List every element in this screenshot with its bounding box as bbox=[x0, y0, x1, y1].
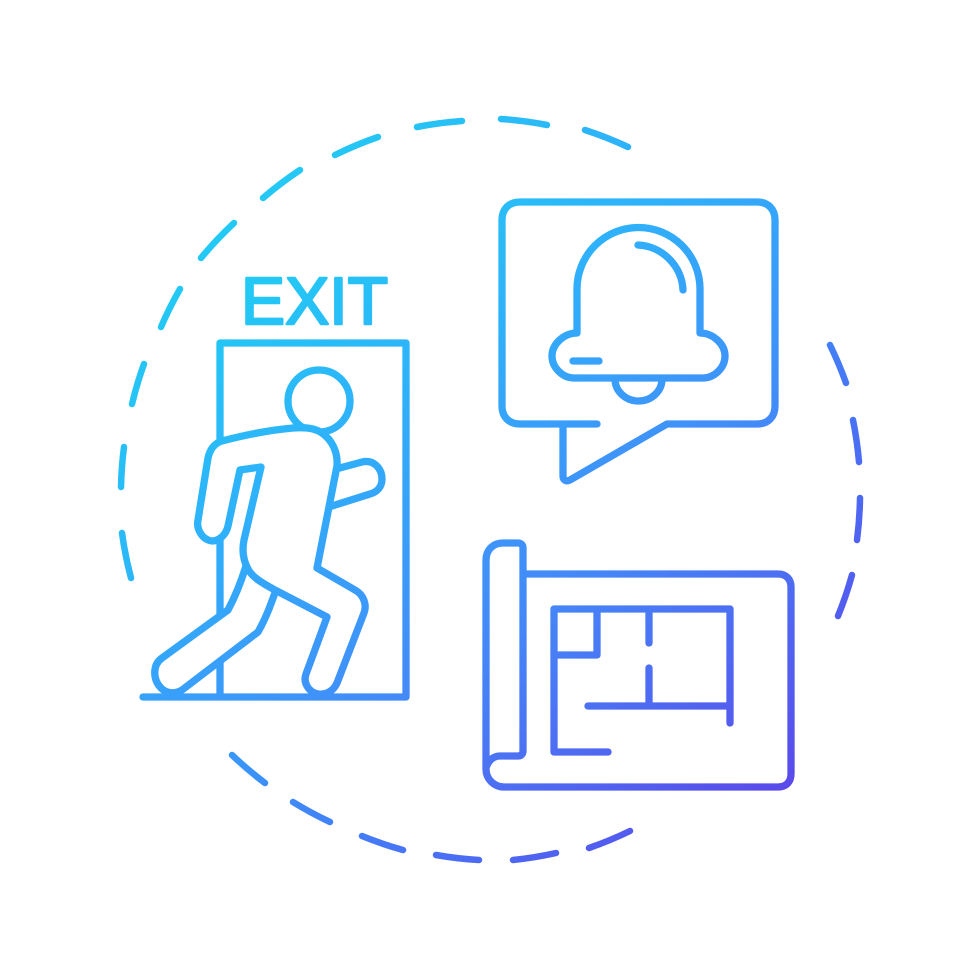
speech bubble bbox=[502, 202, 775, 481]
panel: blueprint floor plan bbox=[486, 543, 791, 787]
panel: speech bubble with bell bbox=[502, 202, 775, 481]
paper roll and sheet bbox=[486, 543, 791, 787]
bell clapper bbox=[615, 379, 662, 401]
bell body bbox=[552, 227, 725, 378]
heading: EXIT sign: EXIT bbox=[241, 264, 388, 339]
bell shine line bbox=[573, 357, 599, 365]
torso and lead leg bbox=[198, 428, 365, 694]
icon: running person bbox=[155, 370, 382, 694]
rear leg bbox=[155, 566, 276, 693]
icon: door and floor bbox=[143, 343, 406, 697]
bell highlight bbox=[638, 245, 683, 290]
dashed circle bbox=[121, 119, 860, 860]
front arm bbox=[332, 461, 382, 506]
head bbox=[288, 370, 350, 432]
floor plan walls bbox=[554, 609, 730, 752]
